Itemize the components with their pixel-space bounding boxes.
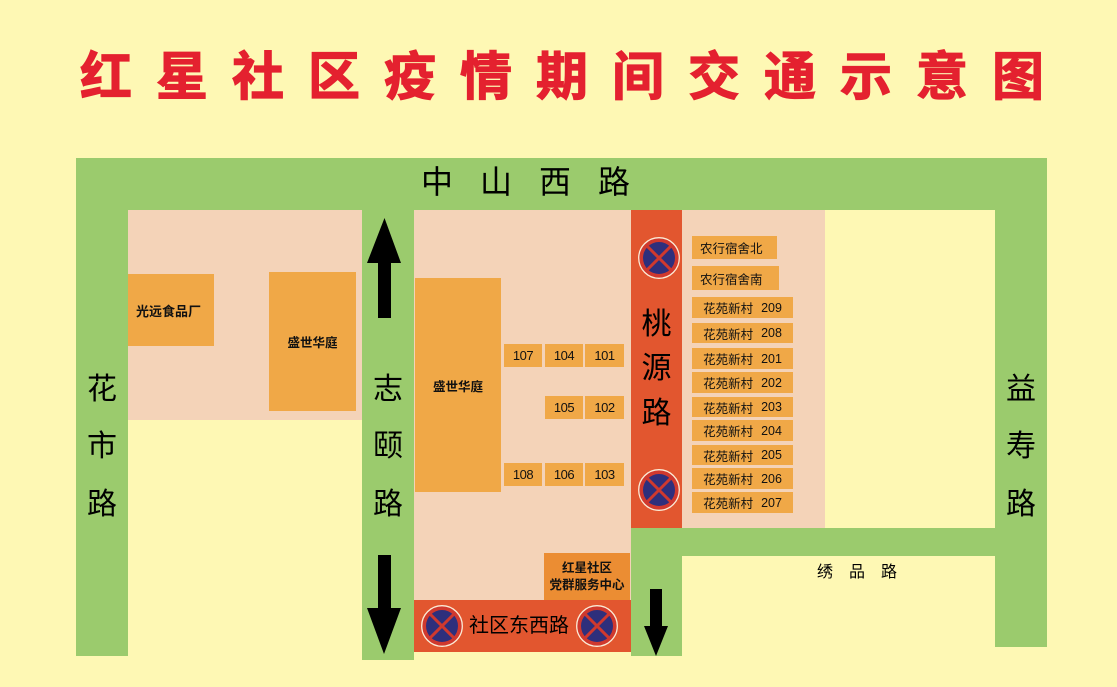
building: 盛世华庭 central: 盛世华庭 [433, 380, 483, 394]
label: 花市路: 花 [87, 373, 117, 406]
building: 花苑新村 205: 花苑新村 [703, 450, 753, 464]
building: 花苑新村 203: 花苑新村 [703, 402, 753, 416]
label: 中山西路: 中山西路 [421, 164, 657, 200]
building: 花苑新村 208: 花苑新村 [703, 328, 753, 342]
label: 桃源路: 源 [642, 352, 672, 385]
building: 花苑新村 205 [692, 445, 793, 465]
building: 花苑新村 204 [692, 420, 793, 441]
building: 107: 107 [513, 348, 533, 363]
label: 益寿路: 益 [1006, 373, 1036, 406]
building: 花苑新村 209: 209 [761, 300, 782, 314]
building: 花苑新村 209 [692, 297, 793, 318]
building: 光远食品厂 [128, 274, 214, 346]
building: 花苑新村 208 [692, 323, 793, 343]
label: 桃源路 [642, 308, 672, 430]
block: northwest community area [128, 210, 362, 420]
label: 桃源路: 路 [642, 397, 672, 430]
building: 花苑新村 202 [692, 372, 793, 393]
label: 花市路: 路 [87, 488, 117, 521]
block: central community area [414, 210, 631, 601]
building: 红星社区党群服务中心: 党群服务中心 [549, 578, 624, 592]
icon: no-parking sign, 社区东西路 west [421, 605, 463, 647]
label: 志颐路: 路 [373, 488, 403, 521]
building: 花苑新村 202: 花苑新村 [703, 377, 753, 391]
building: 花苑新村 206 [692, 468, 793, 489]
road: 中山西路 [76, 158, 1047, 210]
building: 102: 102 [594, 400, 615, 415]
road: 社区东西路 [414, 600, 631, 652]
label: 花市路 [87, 373, 117, 521]
building: 盛世华庭 west [269, 272, 356, 411]
building: 花苑新村 206: 花苑新村 [703, 473, 753, 487]
building: 农行宿舍南: 农行宿舍南 [700, 272, 763, 286]
building: 108 [504, 463, 542, 486]
road: 益寿路 [995, 158, 1047, 647]
building: 花苑新村 207: 207 [761, 496, 782, 510]
building: 105 [545, 396, 583, 419]
label: 益寿路: 寿 [1006, 430, 1036, 463]
label: 志颐路: 志 [373, 373, 403, 406]
building: 花苑新村 203 [692, 397, 793, 417]
building: 农行宿舍南 [692, 266, 779, 290]
icon: no-parking sign, 桃源路 north [638, 237, 680, 279]
road: 绣品路 south branch [631, 528, 682, 656]
building: 花苑新村 206: 206 [761, 472, 782, 486]
building: 红星社区党群服务中心: 红星社区 [562, 560, 612, 574]
building: 花苑新村 203: 203 [761, 400, 782, 414]
building: 光远食品厂: 光远食品厂 [136, 304, 201, 318]
building: 盛世华庭 west: 盛世华庭 [287, 336, 338, 350]
building: 盛世华庭 central [415, 278, 501, 492]
icon: no-parking sign, 社区东西路 east [576, 605, 618, 647]
block: east community area [682, 210, 825, 528]
building: 103 [585, 463, 624, 486]
icon: no-parking sign, 桃源路 south [638, 469, 680, 511]
building: 花苑新村 202: 202 [761, 376, 782, 390]
building: 105: 105 [554, 400, 574, 415]
building: 106 [545, 463, 583, 486]
arrow: 志颐路 southbound [367, 555, 401, 654]
building: 花苑新村 204: 204 [761, 424, 782, 438]
road: 花市路 [76, 158, 128, 656]
building: 花苑新村 207 [692, 492, 793, 513]
road: 桃源路 [631, 210, 682, 528]
label: 益寿路 [1006, 373, 1036, 521]
road: 绣品路 [631, 528, 995, 556]
building: 106: 106 [554, 467, 574, 482]
arrow: 志颐路 northbound [367, 218, 401, 318]
building: 花苑新村 204: 花苑新村 [703, 425, 753, 439]
arrow: 绣品路 branch southbound [644, 589, 668, 656]
road: 志颐路 [362, 210, 414, 660]
building: 农行宿舍北 [692, 236, 777, 259]
label: 花市路: 市 [87, 430, 117, 463]
label: 志颐路: 颐 [373, 430, 403, 463]
building: 红星社区党群服务中心 [544, 553, 630, 600]
building: 花苑新村 201: 201 [761, 352, 782, 366]
building: 花苑新村 208: 208 [761, 326, 782, 340]
building: 101 [585, 344, 624, 367]
building: 花苑新村 209: 花苑新村 [703, 302, 753, 316]
building: 农行宿舍北: 农行宿舍北 [700, 242, 763, 256]
building: 花苑新村 205: 205 [761, 448, 782, 462]
building: 108: 108 [513, 467, 533, 482]
building: 107 [504, 344, 542, 367]
label: 社区东西路: 社区东西路 [469, 615, 569, 637]
label: 桃源路: 桃 [642, 308, 672, 341]
building: 104 [545, 344, 583, 367]
title: 红星社区疫情期间交通示意图 [80, 49, 1068, 107]
building: 花苑新村 207: 花苑新村 [703, 497, 753, 511]
building: 花苑新村 201: 花苑新村 [703, 353, 753, 367]
label: 绣品路: 绣品路 [817, 564, 913, 581]
building: 102 [585, 396, 624, 419]
label: 志颐路 [373, 373, 403, 521]
label: 益寿路: 路 [1006, 488, 1036, 521]
building: 103: 103 [594, 467, 615, 482]
building: 花苑新村 201 [692, 348, 793, 369]
building: 104: 104 [554, 348, 574, 363]
building: 101: 101 [594, 348, 615, 363]
